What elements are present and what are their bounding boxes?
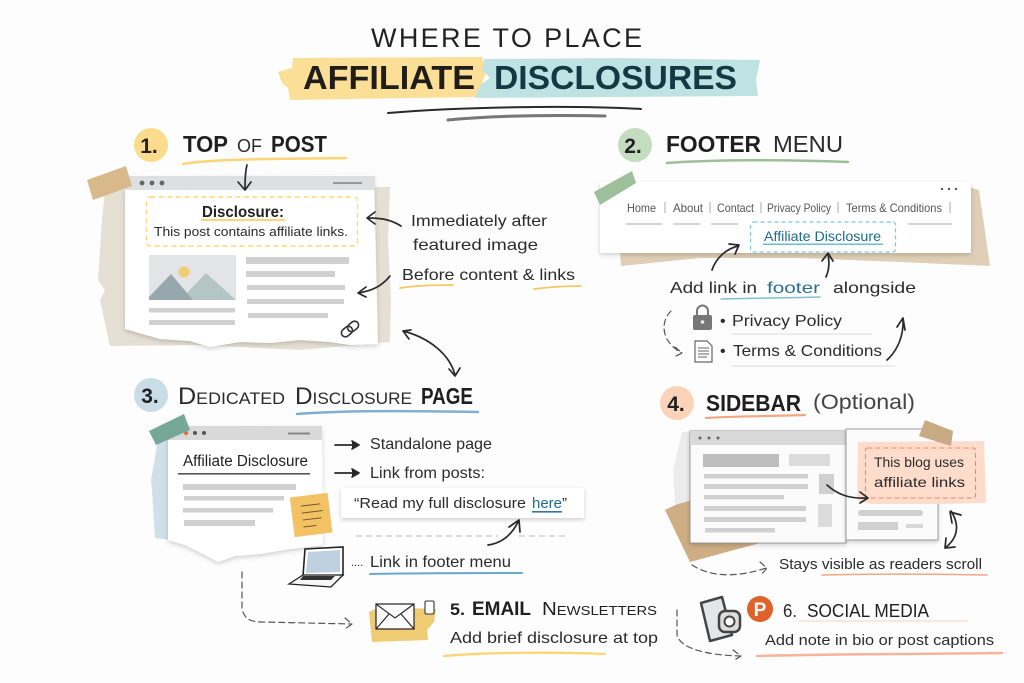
torn paper backing [98, 187, 391, 350]
heading: social media [783, 601, 968, 621]
tape [149, 414, 190, 445]
disclosure callout: Disclosure: [202, 204, 284, 221]
section 1: top of post [87, 128, 581, 350]
footer panel [600, 182, 971, 253]
list: privacy policy, terms and conditions: Terms & Conditions [733, 343, 882, 360]
list: privacy policy, terms and conditions: Privacy Policy [732, 313, 842, 330]
list: privacy policy, terms and conditions: • [720, 343, 726, 360]
heading: email newsletters [450, 599, 657, 620]
heading: disclosures: DISCLOSURES [494, 59, 737, 96]
callout: this blog uses affiliate links: affiliate links [874, 474, 965, 490]
heading: top of post [183, 131, 327, 157]
bullets: standalone page, link from posts: Standalone page [370, 436, 492, 453]
tape [594, 171, 636, 205]
note: add link in footer alongside: footer [767, 280, 821, 297]
note: link in footer menu [351, 554, 522, 574]
disclosure callout: This post contains affiliate links. [154, 224, 348, 239]
arrow: to content [358, 276, 390, 297]
browser window [125, 175, 378, 347]
section 6: social media [677, 596, 1002, 661]
heading: email newsletters: Newsletters [542, 599, 657, 619]
arrow: to callout [827, 485, 868, 503]
heading: sidebar (optional): SIDEBAR [706, 390, 801, 416]
number badge 1: 1. [140, 135, 158, 158]
note: stays visible as readers scroll: Stays visible as readers scroll [779, 556, 982, 573]
sidebar panel [846, 429, 938, 540]
icon: link [340, 320, 360, 338]
section 5: email newsletters [369, 599, 658, 656]
note: before content and links: Before content & links [402, 267, 575, 284]
dashed arrow [692, 562, 767, 576]
callout: this blog uses affiliate links: This blog uses [874, 454, 964, 470]
heading: top of post: OF [237, 136, 262, 156]
note: add note in bio or post captions: Add note in bio or post captions [765, 632, 994, 649]
section 4: sidebar [660, 386, 987, 576]
note: link in footer menu: .... [351, 557, 363, 569]
icon: document [695, 341, 712, 362]
arrow: to here link [488, 520, 520, 545]
number badge 3: 3. [141, 385, 159, 408]
heading: social media: 6. [783, 601, 797, 621]
dashed arrow [677, 610, 741, 661]
note: immediately after featured image: Immediately after [411, 213, 548, 230]
number badge 3 [134, 378, 168, 412]
disclosure callout [146, 197, 358, 246]
nav links: Contact [717, 201, 755, 215]
quote box: “Read my full disclosure [354, 495, 526, 512]
section 2: footer menu [594, 128, 990, 366]
arrows: to link [712, 244, 833, 277]
quote box [341, 488, 584, 518]
note: before content and links [400, 267, 581, 289]
note: immediately after featured image: featured image [413, 237, 538, 254]
heading: footer menu [666, 131, 843, 157]
nav links: Home [627, 201, 656, 215]
section 3: dedicated disclosure page [134, 378, 584, 629]
browser window [690, 431, 846, 543]
tape [87, 166, 132, 200]
title underline strokes [388, 107, 641, 120]
heading: sidebar (optional) [706, 390, 915, 416]
bullets: standalone page, link from posts: Link from posts: [370, 465, 485, 482]
arrow: to callout [367, 212, 401, 226]
heading: top of post: TOP [183, 131, 228, 157]
nav links [626, 201, 952, 224]
nav links: About [673, 201, 704, 215]
tape [919, 420, 953, 446]
dashed arrow: to email [242, 572, 352, 629]
note: add link in footer alongside: Add link in [670, 280, 757, 297]
list: privacy policy, terms and conditions [720, 313, 895, 366]
icon: lock [693, 306, 712, 330]
list: privacy policy, terms and conditions: • [720, 313, 726, 330]
tan paper backing [665, 497, 760, 562]
heading: dedicated disclosure page: Dedicated [178, 383, 285, 410]
note: add link in footer alongside: alongside [833, 280, 916, 297]
browser window [168, 426, 323, 562]
icon: pinterest: P [754, 600, 767, 621]
number badge 2 [618, 128, 652, 162]
heading: dedicated disclosure page: PAGE [421, 383, 473, 409]
heading: footer menu: MENU [773, 131, 843, 157]
arrow: into window [238, 165, 251, 190]
arrow: between top of post and dedicated page [403, 330, 460, 376]
note: add link in footer alongside [670, 280, 916, 299]
title [278, 23, 760, 120]
heading: email newsletters: EMAIL [472, 599, 531, 620]
note: add brief disclosure at top: Add brief disclosure at top [450, 630, 658, 647]
number badge 4: 4. [667, 393, 685, 416]
sticky note [290, 493, 332, 537]
heading: social media: SOCIAL MEDIA [807, 601, 929, 621]
nav links: Privacy Policy [767, 201, 831, 215]
number badge 1 [134, 128, 168, 162]
blue paper backing [151, 440, 170, 540]
heading: dedicated disclosure page: Disclosure [295, 383, 412, 410]
arrow: double vertical [945, 511, 961, 548]
text lines [149, 257, 349, 325]
dashed arrow [664, 311, 682, 357]
gray paper backing [673, 431, 692, 505]
heading: where to place: WHERE TO PLACE [371, 23, 642, 53]
number badge 2: 2. [624, 135, 642, 158]
heading: dedicated disclosure page [178, 383, 473, 410]
icon: phone and camera [701, 597, 740, 641]
quote box: ” [562, 495, 567, 512]
highlighted link: affiliate disclosure: Affiliate Disclosure [764, 229, 881, 244]
number badge 4 [660, 386, 694, 420]
heading: footer menu: FOOTER [666, 131, 761, 157]
brush highlight: teal [475, 58, 760, 98]
icon: laptop [289, 547, 343, 587]
heading: email newsletters: 5. [450, 600, 465, 619]
callout: this blog uses affiliate links [857, 441, 986, 504]
text lines [183, 484, 296, 526]
heading: sidebar (optional): (Optional) [813, 391, 915, 414]
page title: affiliate disclosure: Affiliate Disclosure [183, 453, 308, 470]
image placeholder [149, 255, 236, 300]
heading: affiliate: AFFILIATE [303, 59, 475, 96]
note: immediately after featured image [411, 213, 548, 254]
quote box: here [532, 495, 562, 512]
brush highlight: yellow [278, 57, 486, 100]
arrow: curve up [887, 318, 905, 360]
icon: envelope [369, 601, 436, 642]
heading: top of post: POST [271, 131, 327, 157]
tan paper backing [620, 188, 990, 266]
note: link in footer menu: Link in footer menu [370, 554, 511, 571]
nav links: Terms & Conditions [846, 201, 942, 215]
highlighted link: affiliate disclosure [750, 222, 896, 252]
icon: pinterest [747, 596, 773, 622]
bullets: standalone page, link from posts [335, 436, 492, 482]
